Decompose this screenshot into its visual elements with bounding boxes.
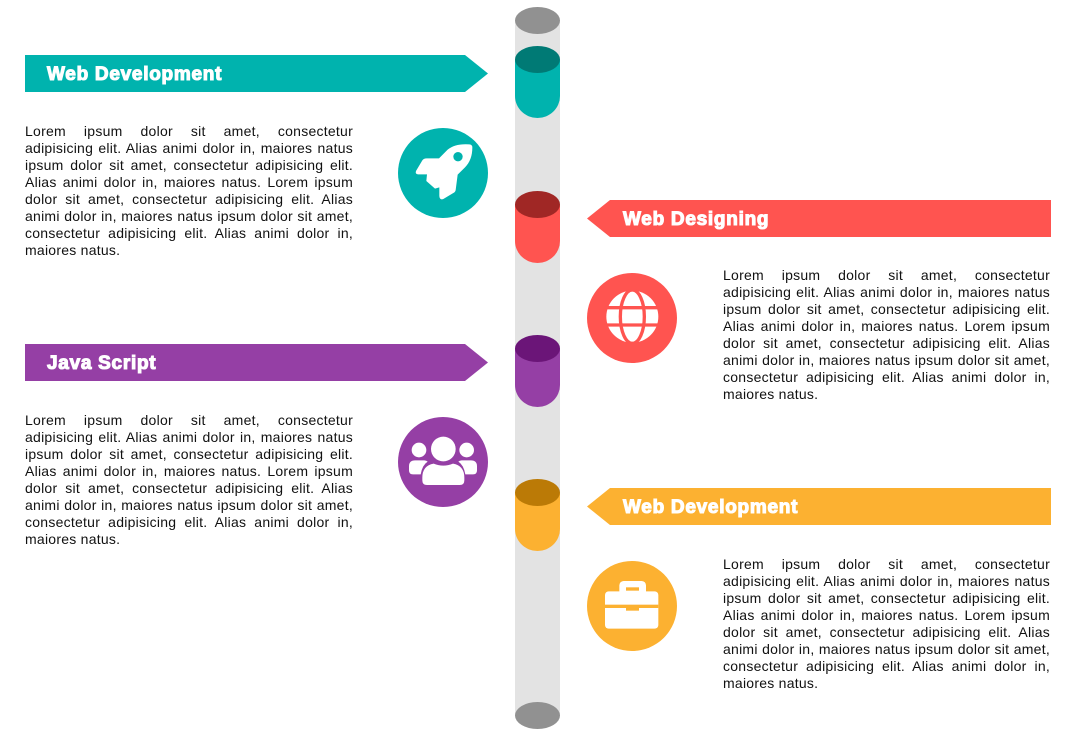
text block: adipisicing elit. Alias animi dolor in, maiores natus [723, 573, 1050, 589]
text block [25, 412, 353, 547]
text block [723, 267, 1050, 402]
arrow banner [25, 344, 488, 381]
text block: ipsum dolor sit amet, consectetur adipisicing elit. [25, 157, 353, 173]
heading: Web Development [623, 497, 798, 518]
cylinder: java script [515, 335, 560, 407]
text block: ipsum dolor sit amet, consectetur adipisicing elit. [723, 301, 1050, 317]
tube bottom cap [515, 702, 560, 729]
text block: Lorem ipsum dolor sit amet, consectetur [723, 556, 1050, 572]
text block: animi dolor in, maiores natus ipsum dolor sit amet, [25, 208, 353, 224]
text block: Lorem ipsum dolor sit amet, consectetur [25, 412, 353, 428]
text block: animi dolor in, maiores natus ipsum dolor sit amet, [723, 352, 1050, 368]
text block: consectetur adipisicing elit. Alias animi dolor in, [25, 514, 353, 530]
text block: dolor sit amet, consectetur adipisicing elit. Alias [723, 335, 1050, 351]
text block: consectetur adipisicing elit. Alias animi dolor in, [723, 658, 1050, 674]
arrow banner [587, 488, 1051, 525]
text block: dolor sit amet, consectetur adipisicing elit. Alias [723, 624, 1050, 640]
icon: people [398, 417, 488, 507]
text block: Alias animi dolor in, maiores natus. Lorem ipsum [723, 318, 1050, 334]
cylinder: web development 2 [515, 479, 560, 551]
text block: Alias animi dolor in, maiores natus. Lorem ipsum [723, 607, 1050, 623]
cylinder: web development [515, 46, 560, 118]
text block: consectetur adipisicing elit. Alias animi dolor in, [25, 225, 353, 241]
text block: Lorem ipsum dolor sit amet, consectetur [25, 123, 353, 139]
text block: ipsum dolor sit amet, consectetur adipisicing elit. [25, 446, 353, 462]
heading: Web Designing [623, 209, 769, 230]
text block: animi dolor in, maiores natus ipsum dolor sit amet, [723, 641, 1050, 657]
text block: maiores natus. [25, 242, 120, 258]
icon: globe [587, 273, 677, 363]
icon: briefcase [587, 561, 677, 651]
central tube [515, 7, 560, 729]
tube top cap [515, 7, 560, 34]
panel: web development 2 [587, 488, 1051, 691]
text block: adipisicing elit. Alias animi dolor in, maiores natus [723, 284, 1050, 300]
text block: adipisicing elit. Alias animi dolor in, maiores natus [25, 140, 353, 156]
cylinder: web designing [515, 191, 560, 263]
text block [723, 556, 1050, 691]
text block [25, 123, 353, 258]
arrow banner [25, 55, 488, 92]
panel: web designing [587, 200, 1051, 402]
text block: maiores natus. [723, 675, 818, 691]
arrow banner [587, 200, 1051, 237]
text block: dolor sit amet, consectetur adipisicing elit. Alias [25, 191, 353, 207]
text block: Alias animi dolor in, maiores natus. Lorem ipsum [25, 463, 353, 479]
icon: rocket [398, 128, 488, 218]
text block: Lorem ipsum dolor sit amet, consectetur [723, 267, 1050, 283]
heading: Java Script [47, 353, 156, 374]
text block: dolor sit amet, consectetur adipisicing elit. Alias [25, 480, 353, 496]
text block: Alias animi dolor in, maiores natus. Lorem ipsum [25, 174, 353, 190]
text block: animi dolor in, maiores natus ipsum dolor sit amet, [25, 497, 353, 513]
text block: ipsum dolor sit amet, consectetur adipisicing elit. [723, 590, 1050, 606]
panel: web development [25, 55, 488, 258]
text block: consectetur adipisicing elit. Alias animi dolor in, [723, 369, 1050, 385]
text block: adipisicing elit. Alias animi dolor in, maiores natus [25, 429, 353, 445]
panel: java script [25, 344, 488, 547]
text block: maiores natus. [723, 386, 818, 402]
text block: maiores natus. [25, 531, 120, 547]
heading: Web Development [47, 64, 222, 85]
